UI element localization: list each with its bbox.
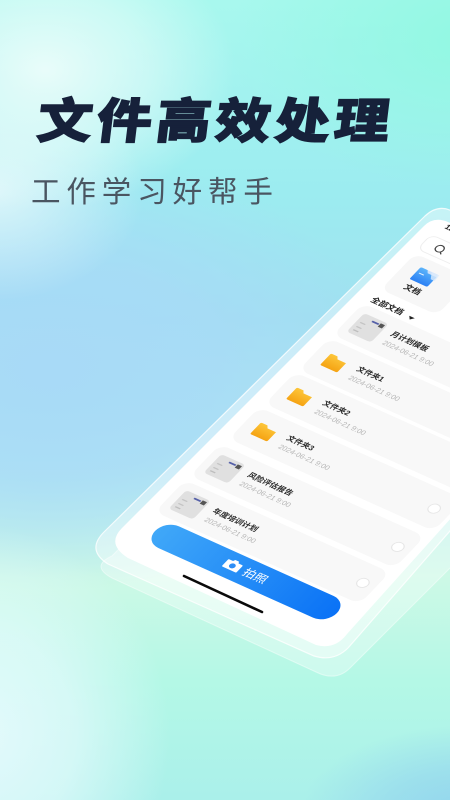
row 1: 月计划模板 xyxy=(388,329,432,353)
row 4 xyxy=(229,407,450,531)
row 2: 2024-06-21 9:00 xyxy=(346,374,402,403)
row 4: 文件夹3 xyxy=(284,433,318,453)
row 3 xyxy=(265,372,450,496)
radio xyxy=(389,541,407,553)
camera button xyxy=(145,520,347,624)
icon: search xyxy=(433,244,447,254)
radio xyxy=(354,577,372,589)
phone glass back layer xyxy=(101,222,450,676)
row 3: 文件夹2 xyxy=(320,398,354,418)
icon: folder xyxy=(250,422,278,442)
subtitle: 工作学习好帮手 xyxy=(31,176,279,209)
icon: blue folder xyxy=(409,267,440,288)
row 6: 2024-06-21 9:00 xyxy=(202,516,258,545)
phone screen xyxy=(115,220,450,646)
icon: folder xyxy=(320,353,348,373)
icon: document xyxy=(347,313,389,343)
home indicator xyxy=(184,576,262,612)
dropdown label: 全部文档 xyxy=(369,295,407,317)
row 1: 2024-06-21 9:00 xyxy=(380,339,436,368)
tile label: 文档 xyxy=(402,282,424,297)
row 5: 风险评估报告 xyxy=(245,470,296,497)
phone glass frame xyxy=(96,208,450,658)
icon: camera xyxy=(222,558,244,573)
tile: documents xyxy=(381,253,450,315)
icon: document xyxy=(204,454,246,484)
title: 文件高效处理 xyxy=(34,96,397,149)
row 2: 文件夹1 xyxy=(354,364,388,384)
dropdown label xyxy=(369,295,418,322)
row 2 xyxy=(299,338,450,462)
radio xyxy=(425,502,443,515)
row 6 xyxy=(155,480,390,604)
search bar xyxy=(417,235,450,282)
row 3: 2024-06-21 9:00 xyxy=(312,408,368,437)
icon: caret xyxy=(407,316,415,321)
row 1 xyxy=(333,303,450,427)
row 6: 年度培训计划 xyxy=(210,506,261,533)
button label: 拍照 xyxy=(239,565,272,586)
icon: folder xyxy=(286,387,314,407)
icon: document xyxy=(169,490,211,520)
row 5 xyxy=(190,444,425,568)
row 5: 2024-06-21 9:00 xyxy=(237,480,293,509)
row 4: 2024-06-21 9:00 xyxy=(276,443,332,472)
